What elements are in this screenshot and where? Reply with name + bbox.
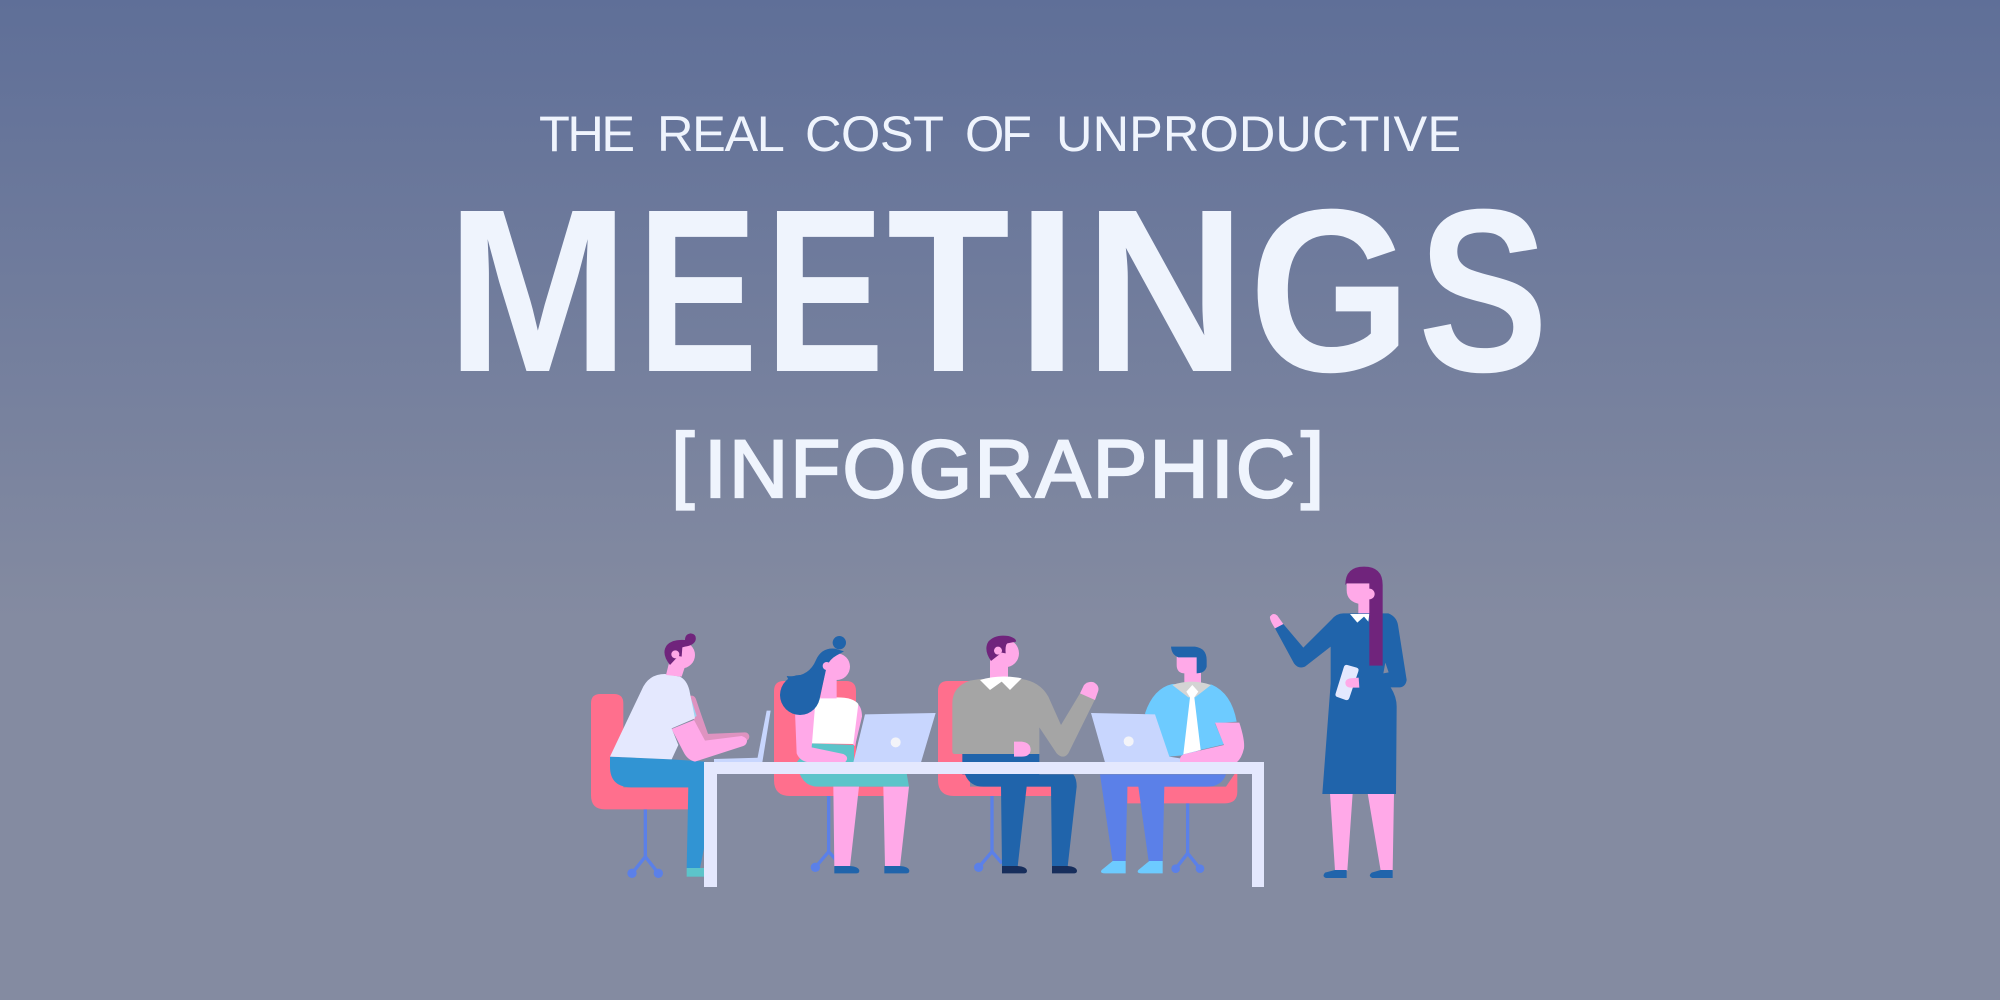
person 1 with chair [591,633,771,878]
phone [1335,665,1359,700]
presenter phone hand [1345,678,1359,688]
main title: I [1016,160,1077,420]
presenter [1270,567,1407,878]
tie [1183,685,1201,754]
neck and arm [795,653,850,762]
trousers 3 [962,754,1077,867]
presenter ear [1364,589,1375,599]
subtitle: REAL [657,105,784,162]
presenter shoes [1324,870,1393,878]
presenter hair [1345,567,1383,666]
dress gap [1383,663,1389,673]
trousers [610,757,705,868]
table [704,762,1264,887]
shoes 4 [1101,861,1163,873]
main title: S [1418,160,1548,420]
presenter collar [1350,614,1369,623]
hair 2 [780,636,846,715]
main title: M [446,160,630,420]
skirt [797,743,909,787]
presenter legs [1330,793,1394,871]
shirt collar [1172,682,1211,697]
shirt 4 [1145,684,1237,757]
hair [664,633,696,665]
shirt [610,674,695,759]
chair 3 [938,681,1052,872]
subtitle: COST [805,105,943,162]
main title: G [1249,160,1412,420]
ear [671,650,679,658]
person 4 with chair [1091,647,1244,873]
presenter hand [1270,614,1283,628]
person 2 with chair [774,636,936,873]
collar [980,677,1022,690]
main title: T [887,160,1010,420]
blouse [812,697,858,744]
subtitle: UNPRODUCTIVE [1056,105,1461,162]
subtitle: THE [539,105,635,162]
infographic tag: ] [1301,416,1324,510]
ear 3 [994,647,1002,655]
front arm [672,720,747,762]
chair 2 [774,681,885,872]
laptop 3 [1091,713,1180,762]
infographic tag: INFOGRAPHIC [704,424,1295,515]
laptop 2 [853,713,936,762]
dress [1275,613,1407,794]
main title [446,160,1548,420]
legs [833,787,909,867]
shoes [834,866,909,873]
neck and head [666,642,695,677]
chair 1 [591,694,688,878]
chair 4 [1127,770,1237,873]
ear 2 [823,662,831,670]
main title: E [765,160,884,420]
back arm 2 [852,703,862,746]
person 3 with chair [938,636,1098,873]
main title: N [1084,160,1246,420]
presenter face [1347,583,1370,604]
shoes 3 [1002,866,1077,873]
neck, head and hands [990,639,1098,757]
sweater [952,679,1095,757]
back arm [689,693,745,738]
arm 4 [1179,723,1244,762]
trousers 4 [1100,774,1226,862]
shoe [687,868,705,877]
hair 4 [1171,647,1207,673]
infographic tag: [ [671,416,694,510]
main title: E [637,160,758,420]
neck and head 4 [1177,655,1201,687]
laptop 1 [714,711,771,762]
presenter neck [1358,600,1370,617]
subtitle: OF [965,105,1032,162]
hair 3 [986,636,1016,661]
